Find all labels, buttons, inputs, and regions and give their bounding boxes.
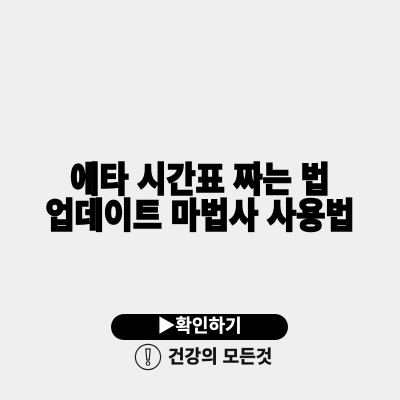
button: confirm — [111, 314, 288, 340]
title: 업데이트 마법사 사용법 — [45, 197, 355, 236]
title: 에타 시간표 짜는 법 — [70, 161, 330, 200]
title — [45, 161, 355, 236]
brand text: 건강의 모든것 — [168, 347, 272, 367]
icon: exclamation circle — [134, 344, 162, 370]
button: confirm: ▶확인하기 — [157, 316, 242, 336]
